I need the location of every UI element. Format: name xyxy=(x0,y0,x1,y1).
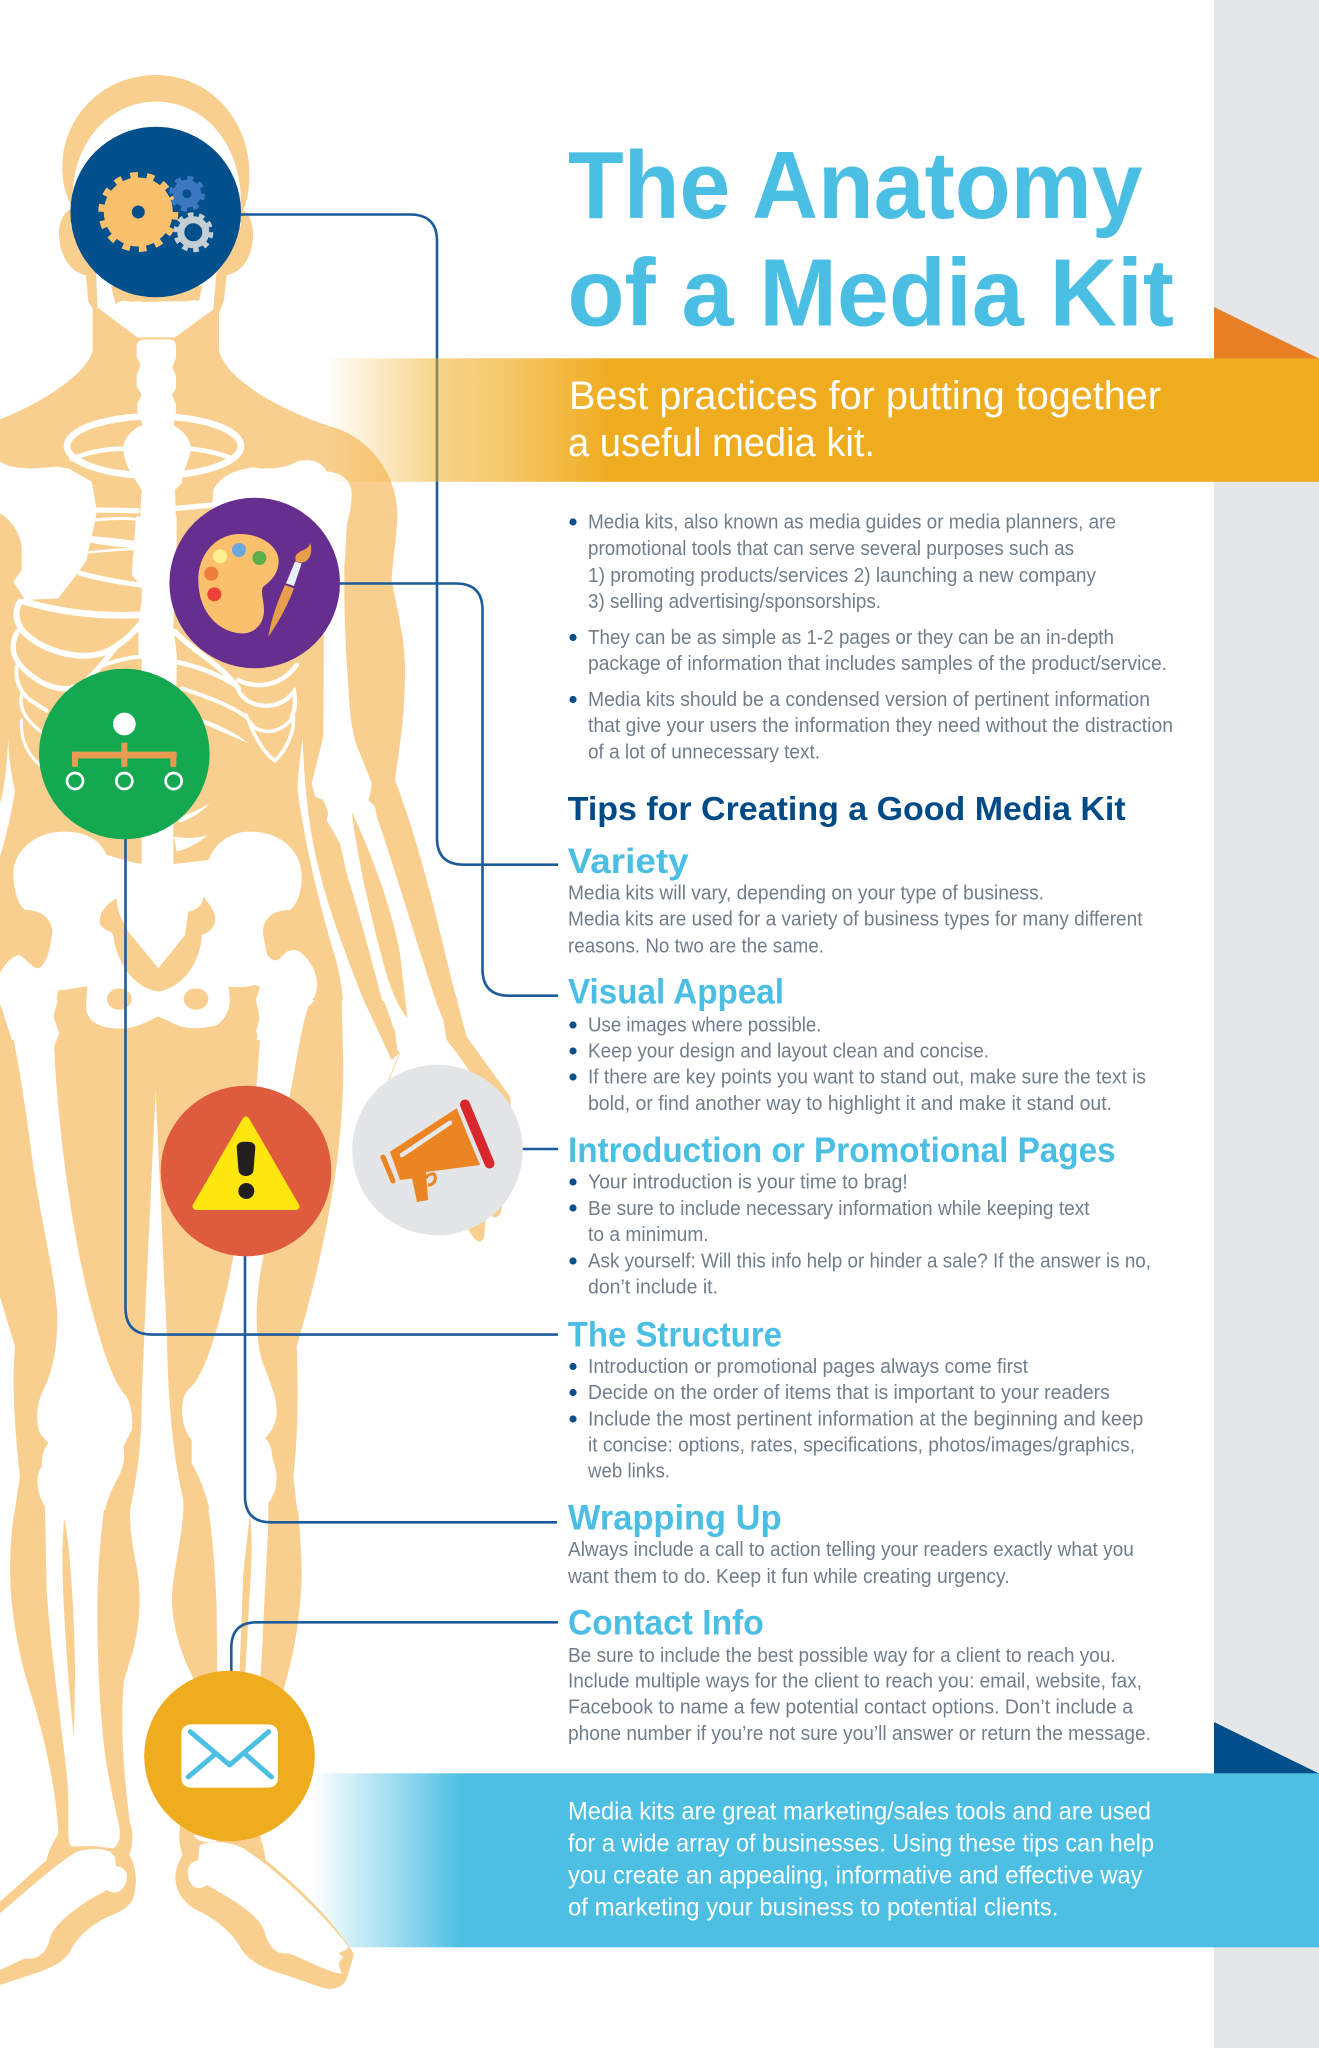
closing paragraph: you create an appealing, informative and effective way xyxy=(568,1862,1143,1890)
section: Contact Info: Be sure to include the best possible way for a client to reach you. xyxy=(568,1645,1116,1667)
section: The Structure: Decide on the order of items that is important to your readers xyxy=(588,1382,1110,1404)
right grey strip xyxy=(1214,0,1319,2048)
connector: megaphone to Introduction xyxy=(522,1148,558,1150)
icon: palette circle xyxy=(169,498,340,668)
navy fold triangle xyxy=(1214,1722,1319,1774)
intro bullet list: Media kits should be a condensed version of pertinent information xyxy=(588,689,1150,711)
section: Visual Appeal xyxy=(568,973,1146,1115)
intro bullet list: 1) promoting products/services 2) launching a new company xyxy=(588,565,1096,587)
intro bullet list: Media kits, also known as media guides or media planners, are xyxy=(588,511,1116,533)
connector: palette to Visual Appeal xyxy=(340,584,558,996)
intro bullet list: package of information that includes samples of the product/service. xyxy=(588,653,1167,675)
torso and arm silhouette xyxy=(0,520,457,1000)
section: Introduction or Promotional Pages: Your introduction is your time to brag! xyxy=(588,1172,908,1194)
title: The Anatomy xyxy=(568,132,1142,239)
section: Variety xyxy=(568,842,1143,958)
closing banner background xyxy=(312,1773,1319,1947)
intro bullet list: promotional tools that can serve several purposes such as xyxy=(588,538,1074,560)
subtitle: Best practices for putting together xyxy=(569,374,1161,418)
title: of a Media Kit xyxy=(568,240,1174,346)
section: Wrapping Up xyxy=(567,1499,1134,1588)
section: Wrapping Up: Wrapping Up xyxy=(568,1499,782,1538)
thigh silhouettes xyxy=(0,999,511,1520)
icon: org chart circle xyxy=(39,669,210,839)
section: Contact Info: phone number if you’re not sure you’ll answer or return the message. xyxy=(568,1723,1151,1745)
section: Visual Appeal: bold, or find another way to highlight it and make it stand out. xyxy=(588,1093,1112,1115)
closing paragraph: for a wide array of businesses. Using these tips can help xyxy=(568,1830,1154,1858)
connector: gears to Variety xyxy=(240,214,558,865)
section: Variety: Variety xyxy=(568,842,689,881)
section: Introduction or Promotional Pages: Ask yourself: Will this info help or hinder a sale? If the answer is no, xyxy=(588,1250,1151,1272)
lower leg and foot silhouettes xyxy=(0,1509,354,1989)
section: Wrapping Up: Always include a call to action telling your readers exactly what you xyxy=(568,1539,1134,1561)
icon: envelope circle xyxy=(144,1671,315,1841)
subtitle banner background xyxy=(325,358,1319,482)
icon: warning circle xyxy=(161,1086,331,1256)
section: Introduction or Promotional Pages: don’t include it. xyxy=(588,1277,718,1299)
intro bullet list xyxy=(569,511,1173,764)
section: Introduction or Promotional Pages xyxy=(568,1131,1151,1299)
section: Contact Info: Include multiple ways for the client to reach you: email, website, fax, xyxy=(568,1671,1142,1693)
icon: gears circle xyxy=(70,127,241,297)
section: The Structure: The Structure xyxy=(568,1316,782,1355)
skull, spine and clavicles xyxy=(0,102,352,643)
connector: org chart to The Structure xyxy=(126,839,558,1335)
tips heading: Tips for Creating a Good Media Kit xyxy=(568,790,1126,828)
section: Introduction or Promotional Pages: Be sure to include necessary information while keeping text xyxy=(588,1198,1090,1220)
intro bullet list: that give your users the information they need without the distraction xyxy=(588,715,1173,737)
section: The Structure xyxy=(568,1316,1143,1482)
section: Visual Appeal: Visual Appeal xyxy=(568,973,784,1012)
human skeleton illustration xyxy=(0,75,511,1989)
section: Visual Appeal: Use images where possible. xyxy=(588,1014,822,1036)
intro bullet list: 3) selling advertising/sponsorships. xyxy=(588,591,881,613)
intro bullet list: They can be as simple as 1-2 pages or they can be an in-depth xyxy=(588,627,1114,649)
section: Variety: reasons. No two are the same. xyxy=(568,936,824,958)
subtitle: a useful media kit. xyxy=(568,421,875,465)
section: Variety: Media kits are used for a variety of business types for many different xyxy=(568,909,1143,931)
connector: warning to Wrapping Up xyxy=(245,1256,557,1522)
section: Contact Info: Facebook to name a few potential contact options. Don’t include a xyxy=(568,1697,1134,1719)
section: Contact Info xyxy=(568,1604,1151,1745)
upper body silhouette xyxy=(0,75,397,580)
title xyxy=(568,132,1174,346)
section: Variety: Media kits will vary, depending on your type of business. xyxy=(568,883,1044,905)
section: The Structure: Include the most pertinent information at the beginning and keep xyxy=(588,1408,1143,1430)
closing paragraph: Media kits are great marketing/sales tools and are used xyxy=(568,1797,1151,1825)
section: Wrapping Up: want them to do. Keep it fun while creating urgency. xyxy=(567,1566,1010,1588)
section: Visual Appeal: If there are key points you want to stand out, make sure the text is xyxy=(588,1067,1146,1089)
section: Visual Appeal: Keep your design and layout clean and concise. xyxy=(588,1040,989,1062)
icon: megaphone circle xyxy=(352,1065,523,1235)
orange fold triangle xyxy=(1214,307,1319,358)
connector: envelope to Contact Info xyxy=(231,1622,558,1671)
rib cage, pelvis and arm bones xyxy=(0,517,436,1040)
section: Introduction or Promotional Pages: Introduction or Promotional Pages xyxy=(568,1131,1116,1170)
closing paragraph: of marketing your business to potential clients. xyxy=(568,1894,1058,1922)
intro bullet list: of a lot of unnecessary text. xyxy=(588,742,820,764)
section: Introduction or Promotional Pages: to a minimum. xyxy=(588,1224,709,1246)
subtitle xyxy=(568,374,1161,465)
section: The Structure: it concise: options, rates, specifications, photos/images/graphics, xyxy=(588,1435,1135,1457)
section: Contact Info: Contact Info xyxy=(568,1604,764,1642)
section: The Structure: Introduction or promotional pages always come first xyxy=(588,1356,1028,1378)
closing paragraph xyxy=(568,1797,1154,1922)
section: The Structure: web links. xyxy=(587,1460,670,1482)
